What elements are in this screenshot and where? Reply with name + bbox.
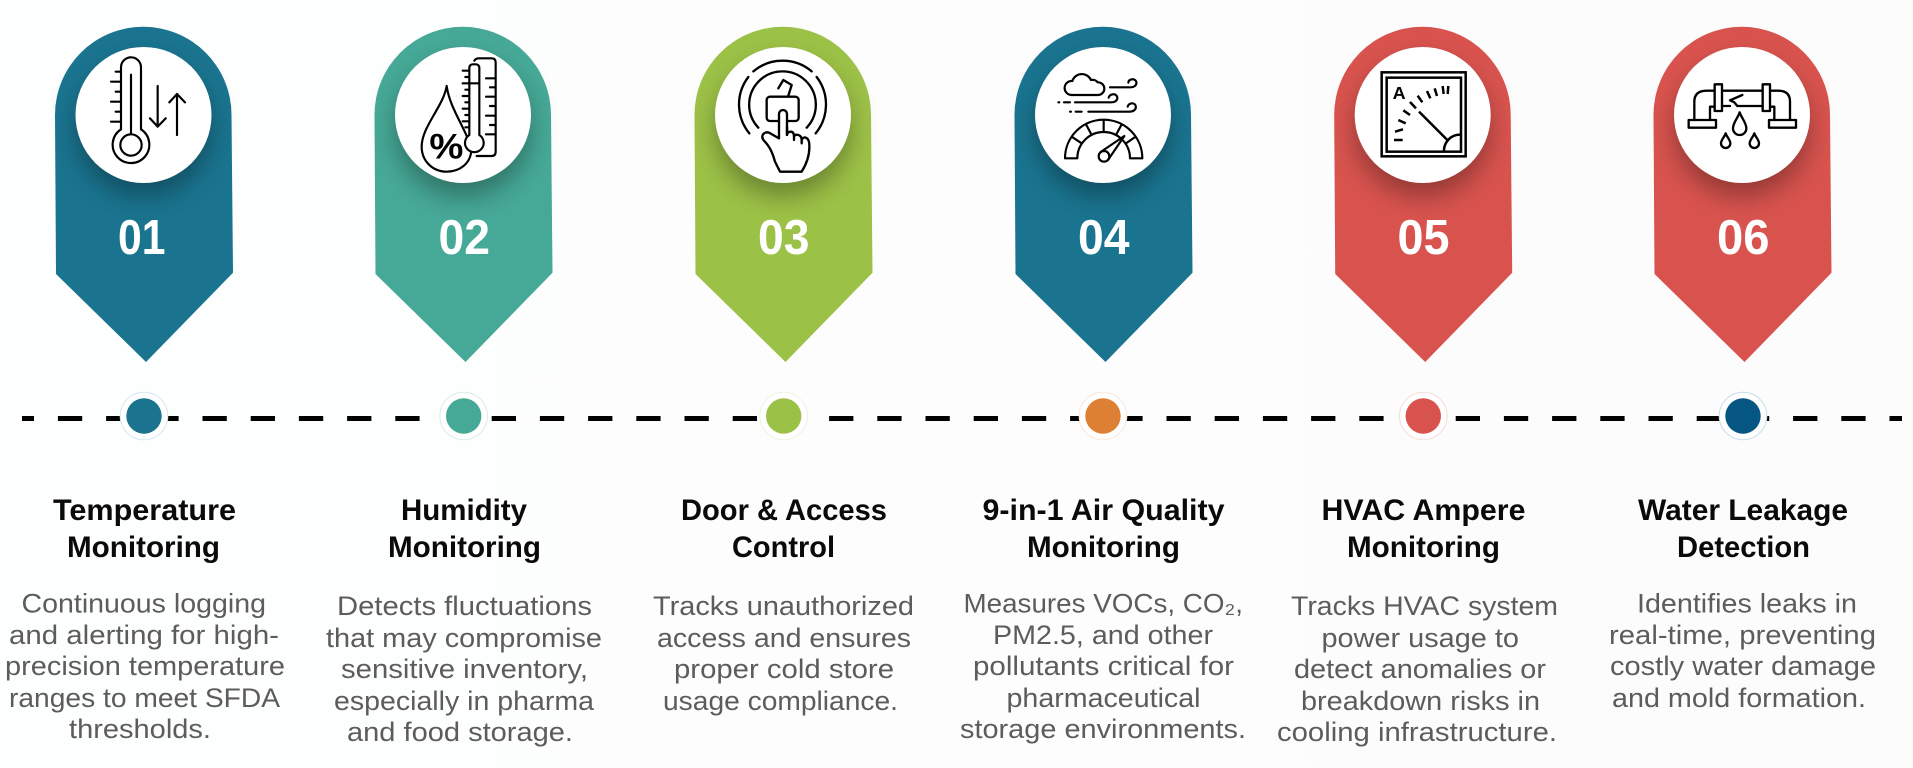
timeline dot 3 bbox=[760, 392, 808, 440]
number 01: 01 bbox=[118, 211, 166, 265]
text: humidity description: that may compromise bbox=[326, 623, 602, 653]
text: HVAC description: detect anomalies or bbox=[1294, 654, 1546, 684]
number 06: 06 bbox=[1717, 211, 1770, 265]
text: HVAC description: cooling infrastructure. bbox=[1277, 717, 1557, 747]
text: water leakage description: real-time, preventing bbox=[1609, 620, 1876, 650]
text: humidity description: sensitive inventory, bbox=[341, 654, 588, 684]
text: HVAC description: Tracks HVAC system bbox=[1291, 591, 1558, 621]
text: door access description: Tracks unauthorized bbox=[653, 591, 914, 621]
heading: temperature monitoring bbox=[53, 494, 236, 564]
text: temperature description bbox=[5, 588, 285, 744]
icon: leaking pipe bbox=[1689, 84, 1796, 148]
text: water leakage description bbox=[1609, 588, 1876, 713]
text: air quality description: PM2.5, and other bbox=[993, 620, 1213, 650]
text: temperature description: thresholds. bbox=[69, 714, 211, 744]
heading: air quality monitoring: Monitoring bbox=[1027, 531, 1180, 564]
text: door access description: proper cold store bbox=[674, 654, 894, 684]
pin body 05 bbox=[1334, 27, 1512, 362]
heading: humidity monitoring: Humidity bbox=[401, 494, 527, 527]
panel: pin 02 humidity bbox=[374, 27, 552, 362]
text: air quality description: storage environments. bbox=[960, 714, 1246, 744]
icon: finger pressing access button bbox=[739, 61, 826, 172]
text: HVAC description bbox=[1277, 591, 1558, 747]
timeline dashed line bbox=[22, 416, 1902, 421]
text: humidity description: Detects fluctuations bbox=[337, 591, 592, 621]
heading: HVAC ampere monitoring bbox=[1322, 494, 1526, 564]
heading: air quality monitoring: 9-in-1 Air Quality bbox=[982, 494, 1225, 527]
pin body 04 bbox=[1014, 27, 1192, 362]
text: temperature description: and alerting for high- bbox=[9, 620, 279, 650]
panel: pin 05 HVAC ampere bbox=[1334, 27, 1512, 362]
heading: temperature monitoring: Monitoring bbox=[67, 531, 220, 564]
timeline dot 2 bbox=[440, 392, 488, 440]
text: temperature description: precision temperature bbox=[5, 651, 285, 681]
panel: pin 04 air quality bbox=[1014, 27, 1192, 362]
heading: humidity monitoring: Monitoring bbox=[388, 531, 541, 564]
text: humidity description bbox=[326, 591, 602, 747]
text: air quality description bbox=[960, 588, 1246, 744]
icon: humidity drop and thermometer: % bbox=[429, 128, 463, 167]
heading: humidity monitoring bbox=[388, 494, 541, 564]
text: air quality description: Measures VOCs, CO₂, bbox=[964, 588, 1243, 618]
timeline dot 1 bbox=[120, 392, 168, 440]
icon: humidity drop and thermometer bbox=[422, 58, 496, 172]
timeline dot 4 bbox=[1079, 392, 1127, 440]
number 04: 04 bbox=[1078, 211, 1130, 265]
number 03: 03 bbox=[758, 211, 810, 265]
heading: water leakage detection: Detection bbox=[1677, 531, 1810, 564]
panel: pin 01 temperature bbox=[55, 27, 233, 362]
text: temperature description: Continuous logging bbox=[22, 588, 266, 618]
heading: air quality monitoring bbox=[982, 494, 1225, 564]
heading: temperature monitoring: Temperature bbox=[53, 494, 236, 527]
text: temperature description: ranges to meet SFDA bbox=[9, 683, 280, 713]
icon: thermometer with arrows bbox=[111, 57, 185, 163]
heading: HVAC ampere monitoring: HVAC Ampere bbox=[1322, 494, 1526, 527]
heading: door and access control bbox=[681, 494, 887, 564]
pin body 06 bbox=[1654, 27, 1832, 362]
text: HVAC description: power usage to bbox=[1322, 623, 1519, 653]
number 02: 02 bbox=[438, 211, 490, 265]
icon: ammeter dial: A bbox=[1393, 83, 1406, 103]
heading: door and access control: Control bbox=[732, 531, 835, 564]
pin body 03 bbox=[694, 27, 872, 362]
text: door access description: usage compliance. bbox=[663, 686, 898, 716]
text: HVAC description: breakdown risks in bbox=[1301, 686, 1540, 716]
text: door access description bbox=[653, 591, 914, 716]
timeline dot 5 bbox=[1400, 392, 1447, 440]
text: humidity description: especially in pharma bbox=[334, 686, 594, 716]
text: humidity description: and food storage. bbox=[347, 717, 573, 747]
heading: door and access control: Door & Access bbox=[681, 494, 887, 527]
icon: cloud wind and gauge bbox=[1058, 74, 1142, 162]
heading: HVAC ampere monitoring: Monitoring bbox=[1347, 531, 1500, 564]
pin body 02 bbox=[374, 27, 552, 362]
panel: pin 06 water leakage bbox=[1654, 27, 1832, 362]
panel: pin 03 door access bbox=[694, 27, 872, 362]
number 05: 05 bbox=[1398, 211, 1450, 265]
heading: water leakage detection: Water Leakage bbox=[1638, 494, 1848, 527]
timeline dot 6 bbox=[1719, 392, 1767, 440]
text: water leakage description: costly water damage bbox=[1610, 651, 1876, 681]
text: water leakage description: Identifies leaks in bbox=[1637, 588, 1857, 618]
text: air quality description: pollutants critical for bbox=[973, 651, 1234, 681]
text: water leakage description: and mold formation. bbox=[1612, 683, 1866, 713]
heading: water leakage detection bbox=[1638, 494, 1848, 564]
text: door access description: access and ensures bbox=[657, 623, 911, 653]
icon: ammeter dial bbox=[1382, 72, 1466, 156]
pin body 01 bbox=[55, 27, 233, 362]
text: air quality description: pharmaceutical bbox=[1006, 683, 1200, 713]
